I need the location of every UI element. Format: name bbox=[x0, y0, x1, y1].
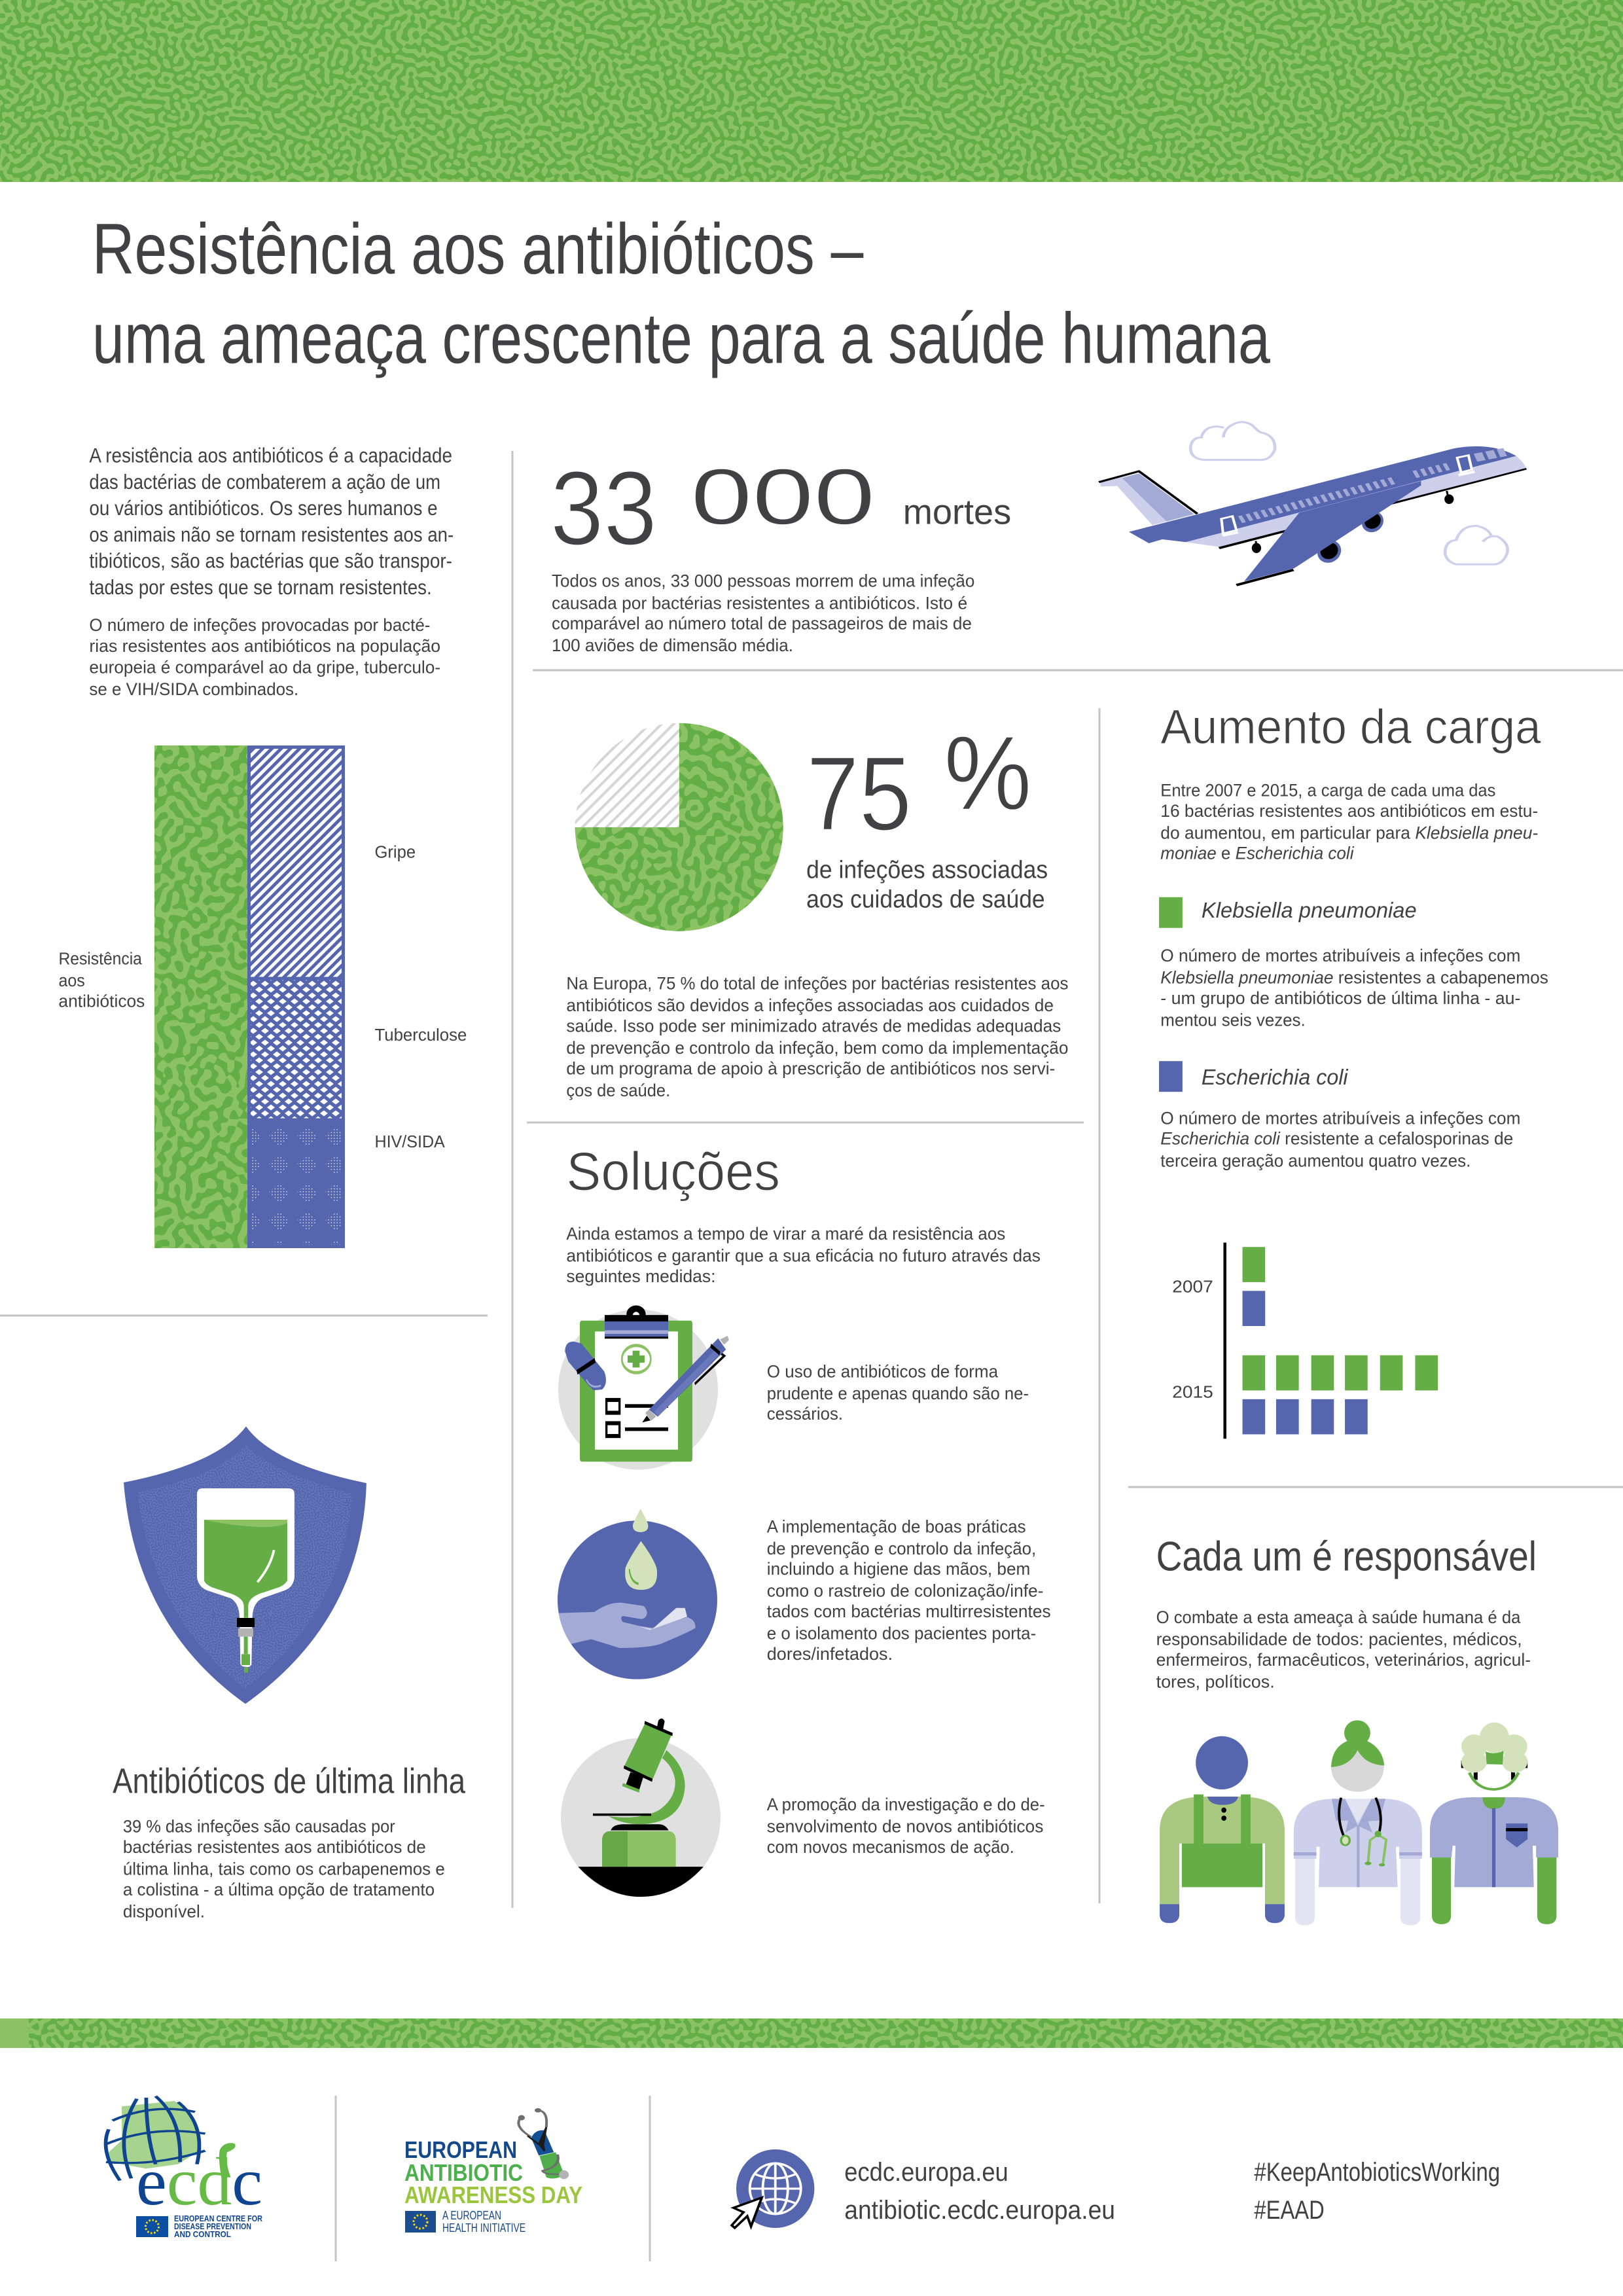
text: prudent use: prudente e apenas quando são ne- bbox=[767, 1383, 1029, 1403]
comparison paragraph: rias resistentes aos antibióticos na população bbox=[89, 636, 440, 656]
burden text: moniae e Escherichia coli bbox=[1160, 843, 1354, 863]
pie chart bbox=[575, 723, 783, 931]
healthcare infections paragraph: Na Europa, 75 % do total de infeções por bactérias resistentes aos bbox=[566, 973, 1068, 994]
chart labels: aos bbox=[58, 972, 85, 990]
last-line text bbox=[123, 1816, 445, 1921]
responsibility text: responsabilidade de todos: pacientes, médicos, bbox=[1156, 1628, 1522, 1649]
burden text: do aumentou, em particular para Klebsiella pneu- bbox=[1160, 822, 1538, 842]
icon: hand and drop bbox=[558, 1509, 717, 1679]
chart labels: Gripe bbox=[374, 843, 416, 861]
last-line text: última linha, tais como os carbapenemos e bbox=[123, 1859, 445, 1879]
burden text: 16 bactérias resistentes aos antibióticos em estu- bbox=[1160, 800, 1538, 821]
web addresses: antibiotic.ecdc.europa.eu bbox=[844, 2195, 1115, 2225]
icon: web globe with cursor bbox=[732, 2149, 814, 2228]
legend: Klebsiella: Klebsiella pneumoniae bbox=[1202, 899, 1417, 923]
person: farmer bbox=[1160, 1736, 1285, 1923]
text: good practices: dores/infetados. bbox=[767, 1643, 893, 1664]
intro paragraph: tibióticos, são as bactérias que são transpor- bbox=[89, 550, 452, 573]
text: research bbox=[767, 1794, 1045, 1857]
big number: mortes bbox=[903, 493, 1011, 532]
Klebsiella text: O número de mortes atribuíveis a infeções com bbox=[1160, 945, 1520, 965]
healthcare infections paragraph: de um programa de apoio à prescrição de antibióticos nos servi- bbox=[566, 1058, 1055, 1078]
logo: European Antibiotic Awareness Day bbox=[404, 2108, 582, 2234]
web addresses bbox=[844, 2157, 1115, 2225]
EAAD wordmark: EUROPEAN bbox=[404, 2136, 517, 2163]
legend: E. coli: Escherichia coli bbox=[1202, 1066, 1349, 1090]
percent caption: de infeções associadas bbox=[806, 857, 1048, 884]
ECDC name: DISEASE PREVENTION bbox=[174, 2221, 251, 2231]
chart: deaths 2007 vs 2015 bbox=[1172, 1243, 1438, 1439]
solutions intro: Ainda estamos a tempo de virar a maré da resistência aos bbox=[566, 1223, 1005, 1244]
percent caption bbox=[806, 857, 1048, 913]
deaths text: Todos os anos, 33 000 pessoas morrem de uma infeção bbox=[552, 571, 974, 591]
burden text bbox=[1160, 780, 1538, 863]
EU flag bbox=[136, 2216, 168, 2237]
title: uma ameaça crescente para a saúde humana bbox=[92, 299, 1270, 379]
responsibility text: O combate a esta ameaça à saúde humana é da bbox=[1156, 1607, 1521, 1627]
intro paragraph: os animais não se tornam resistentes aos an- bbox=[89, 523, 454, 546]
deaths text: comparável ao número total de passageiros de mais de bbox=[552, 613, 972, 634]
deaths text: causada por bactérias resistentes a antibióticos. Isto é bbox=[552, 592, 967, 613]
chart: deaths 2007 vs 2015: 2015 bbox=[1172, 1384, 1213, 1402]
comparison paragraph bbox=[89, 615, 440, 699]
pie slice: 25 percent bbox=[575, 723, 679, 827]
title bbox=[92, 209, 1270, 379]
text: prudent use bbox=[767, 1361, 1029, 1424]
solutions intro: antibióticos e garantir que a sua eficácia no futuro através das bbox=[566, 1246, 1041, 1266]
chart labels: HIV/SIDA bbox=[374, 1133, 446, 1151]
healthcare infections paragraph: saúde. Isso pode ser minimizado através de medidas adequadas bbox=[566, 1016, 1061, 1036]
bar segment: HIV bbox=[249, 1120, 343, 1246]
burden text: Entre 2007 e 2015, a carga de cada uma das bbox=[1160, 780, 1495, 800]
ECDC name: EUROPEAN CENTRE FOR bbox=[174, 2214, 263, 2223]
logo: ECDC bbox=[105, 2096, 263, 2239]
text: good practices: de prevenção e controlo da infeção, bbox=[767, 1538, 1036, 1558]
legend: E. coli bbox=[1159, 1061, 1349, 1092]
intro paragraph bbox=[89, 444, 454, 599]
big percent: % bbox=[944, 715, 1032, 833]
pie slice: 75 percent bbox=[575, 723, 783, 931]
heading: solutions: Soluções bbox=[566, 1141, 780, 1202]
initiative text bbox=[442, 2209, 526, 2234]
EU flag bbox=[405, 2211, 436, 2233]
EAAD wordmark: ANTIBIOTIC bbox=[404, 2159, 523, 2186]
E. coli text bbox=[1160, 1107, 1520, 1170]
bar segment: flu bbox=[249, 747, 343, 979]
header pattern band bbox=[0, 0, 1623, 182]
panel: introduction text bbox=[89, 444, 454, 699]
text: good practices: incluindo a higiene das mãos, bem bbox=[767, 1558, 1030, 1579]
big percent bbox=[806, 715, 1032, 853]
panel: everyone is responsible bbox=[1156, 1534, 1558, 1926]
icon: three people bbox=[1160, 1720, 1558, 1926]
person: doctor bbox=[1294, 1720, 1422, 1926]
text: prudent use: cessários. bbox=[767, 1403, 843, 1424]
intro paragraph: das bactérias de combaterem a ação de um bbox=[89, 471, 440, 493]
healthcare infections paragraph: ços de saúde. bbox=[566, 1080, 670, 1100]
web addresses: ecdc.europa.eu bbox=[844, 2157, 1008, 2187]
solutions intro bbox=[566, 1223, 1041, 1286]
E. coli text: Escherichia coli resistente a cefalosporinas de bbox=[1160, 1128, 1513, 1149]
comparison paragraph: se e VIH/SIDA combinados. bbox=[89, 679, 298, 699]
bar: antibiotic resistance bbox=[154, 745, 247, 1248]
ECDC name bbox=[174, 2214, 263, 2239]
intro paragraph: ou vários antibióticos. Os seres humanos e bbox=[89, 497, 438, 520]
deaths text bbox=[552, 571, 974, 655]
text: prudent use: O uso de antibióticos de forma bbox=[767, 1361, 999, 1381]
chart labels bbox=[58, 843, 467, 1151]
Klebsiella text bbox=[1160, 945, 1548, 1030]
text: research: senvolvimento de novos antibióticos bbox=[767, 1816, 1043, 1837]
intro paragraph: A resistência aos antibióticos é a capacidade bbox=[89, 444, 452, 467]
panel: 75 percent bbox=[548, 696, 1068, 1100]
last-line text: a colistina - a última opção de tratamento bbox=[123, 1879, 435, 1899]
initiative text: HEALTH INITIATIVE bbox=[442, 2221, 526, 2234]
Klebsiella text: - um grupo de antibióticos de última linha - au- bbox=[1160, 988, 1520, 1008]
title: Resistência aos antibióticos – bbox=[92, 209, 863, 289]
ECDC globe bbox=[105, 2096, 236, 2181]
text: good practices: tados com bactérias multirresistentes bbox=[767, 1601, 1051, 1621]
stacked bar chart: infections comparison bbox=[58, 719, 467, 1274]
hashtags bbox=[1254, 2157, 1500, 2225]
Klebsiella text: Klebsiella pneumoniae resistentes a cabapenemos bbox=[1160, 967, 1548, 988]
text: good practices bbox=[767, 1516, 1051, 1664]
chart labels: Tuberculose bbox=[374, 1026, 467, 1045]
panel: last-line antibiotics bbox=[113, 1425, 465, 1921]
last-line text: 39 % das infeções são causadas por bbox=[123, 1816, 395, 1837]
EAAD wordmark: AWARENESS DAY bbox=[404, 2181, 582, 2208]
big number bbox=[550, 450, 1011, 567]
big number: 33 bbox=[550, 450, 657, 567]
footer pattern band bbox=[0, 1999, 1623, 2068]
icon: airplane with clouds bbox=[1099, 422, 1526, 585]
panel: 33 000 deaths bbox=[550, 422, 1526, 655]
legend: Klebsiella bbox=[1159, 897, 1417, 928]
intro paragraph: tadas por estes que se tornam resistentes. bbox=[89, 576, 432, 599]
E. coli text: O número de mortes atribuíveis a infeções com bbox=[1160, 1107, 1520, 1128]
text: good practices: como o rastreio de colonização/infe- bbox=[767, 1581, 1043, 1601]
text: good practices: e o isolamento dos pacientes porta- bbox=[767, 1623, 1036, 1643]
percent caption: aos cuidados de saúde bbox=[806, 886, 1045, 913]
big percent: 75 bbox=[806, 735, 912, 853]
hashtags: #KeepAntobioticsWorking bbox=[1254, 2157, 1500, 2187]
icon: microscope bbox=[561, 1719, 721, 1897]
responsibility text: tores, políticos. bbox=[1156, 1671, 1275, 1691]
responsibility text: enfermeiros, farmacêuticos, veterinários, agricul- bbox=[1156, 1649, 1531, 1670]
icon: shield with infusion bag bbox=[118, 1425, 375, 1708]
panel: solutions bbox=[558, 1141, 1051, 1897]
healthcare infections paragraph bbox=[566, 973, 1068, 1100]
last-line text: disponível. bbox=[123, 1901, 205, 1921]
deaths text: 100 aviões de dimensão média. bbox=[552, 635, 793, 655]
ECDC wordmark: ecdc bbox=[136, 2144, 262, 2219]
person: surgeon bbox=[1430, 1723, 1558, 1924]
initiative text: A EUROPEAN bbox=[442, 2209, 501, 2222]
icon: clipboard bbox=[558, 1305, 729, 1469]
ECDC name: AND CONTROL bbox=[174, 2229, 231, 2239]
icon: capsule and stethoscope bbox=[518, 2108, 569, 2179]
text: research: A promoção da investigação e do de- bbox=[767, 1794, 1045, 1814]
healthcare infections paragraph: antibióticos são devidos a infeções associadas aos cuidados de bbox=[566, 995, 1054, 1015]
panel: increasing burden bbox=[1159, 700, 1548, 1439]
heading: last-line antibiotics: Antibióticos de última linha bbox=[113, 1761, 465, 1801]
comparison paragraph: europeia é comparável ao da gripe, tuberculo- bbox=[89, 657, 440, 677]
hashtags: #EAAD bbox=[1254, 2195, 1325, 2225]
E. coli text: terceira geração aumentou quatro vezes. bbox=[1160, 1150, 1471, 1170]
healthcare infections paragraph: de prevenção e controlo da infeção, bem como da implementação bbox=[566, 1037, 1068, 1058]
chart: deaths 2007 vs 2015: 2007 bbox=[1172, 1278, 1213, 1297]
bar segment: tuberculosis bbox=[249, 978, 343, 1120]
chart labels: Resistência bbox=[58, 950, 143, 969]
Klebsiella text: mentou seis vezes. bbox=[1160, 1010, 1306, 1030]
big number: 000 bbox=[690, 453, 875, 541]
text: good practices: A implementação de boas práticas bbox=[767, 1516, 1026, 1536]
heading: increasing burden: Aumento da carga bbox=[1160, 700, 1542, 754]
EAAD wordmark bbox=[404, 2136, 582, 2208]
heading: everyone is responsible: Cada um é responsável bbox=[1156, 1534, 1537, 1579]
last-line text: bactérias resistentes aos antibióticos de bbox=[123, 1837, 426, 1857]
chart labels: antibióticos bbox=[58, 993, 145, 1011]
solutions intro: seguintes medidas: bbox=[566, 1266, 716, 1286]
comparison paragraph: O número de infeções provocadas por bacté- bbox=[89, 615, 430, 635]
text: research: com novos mecanismos de ação. bbox=[767, 1837, 1014, 1857]
responsibility text bbox=[1156, 1607, 1531, 1691]
